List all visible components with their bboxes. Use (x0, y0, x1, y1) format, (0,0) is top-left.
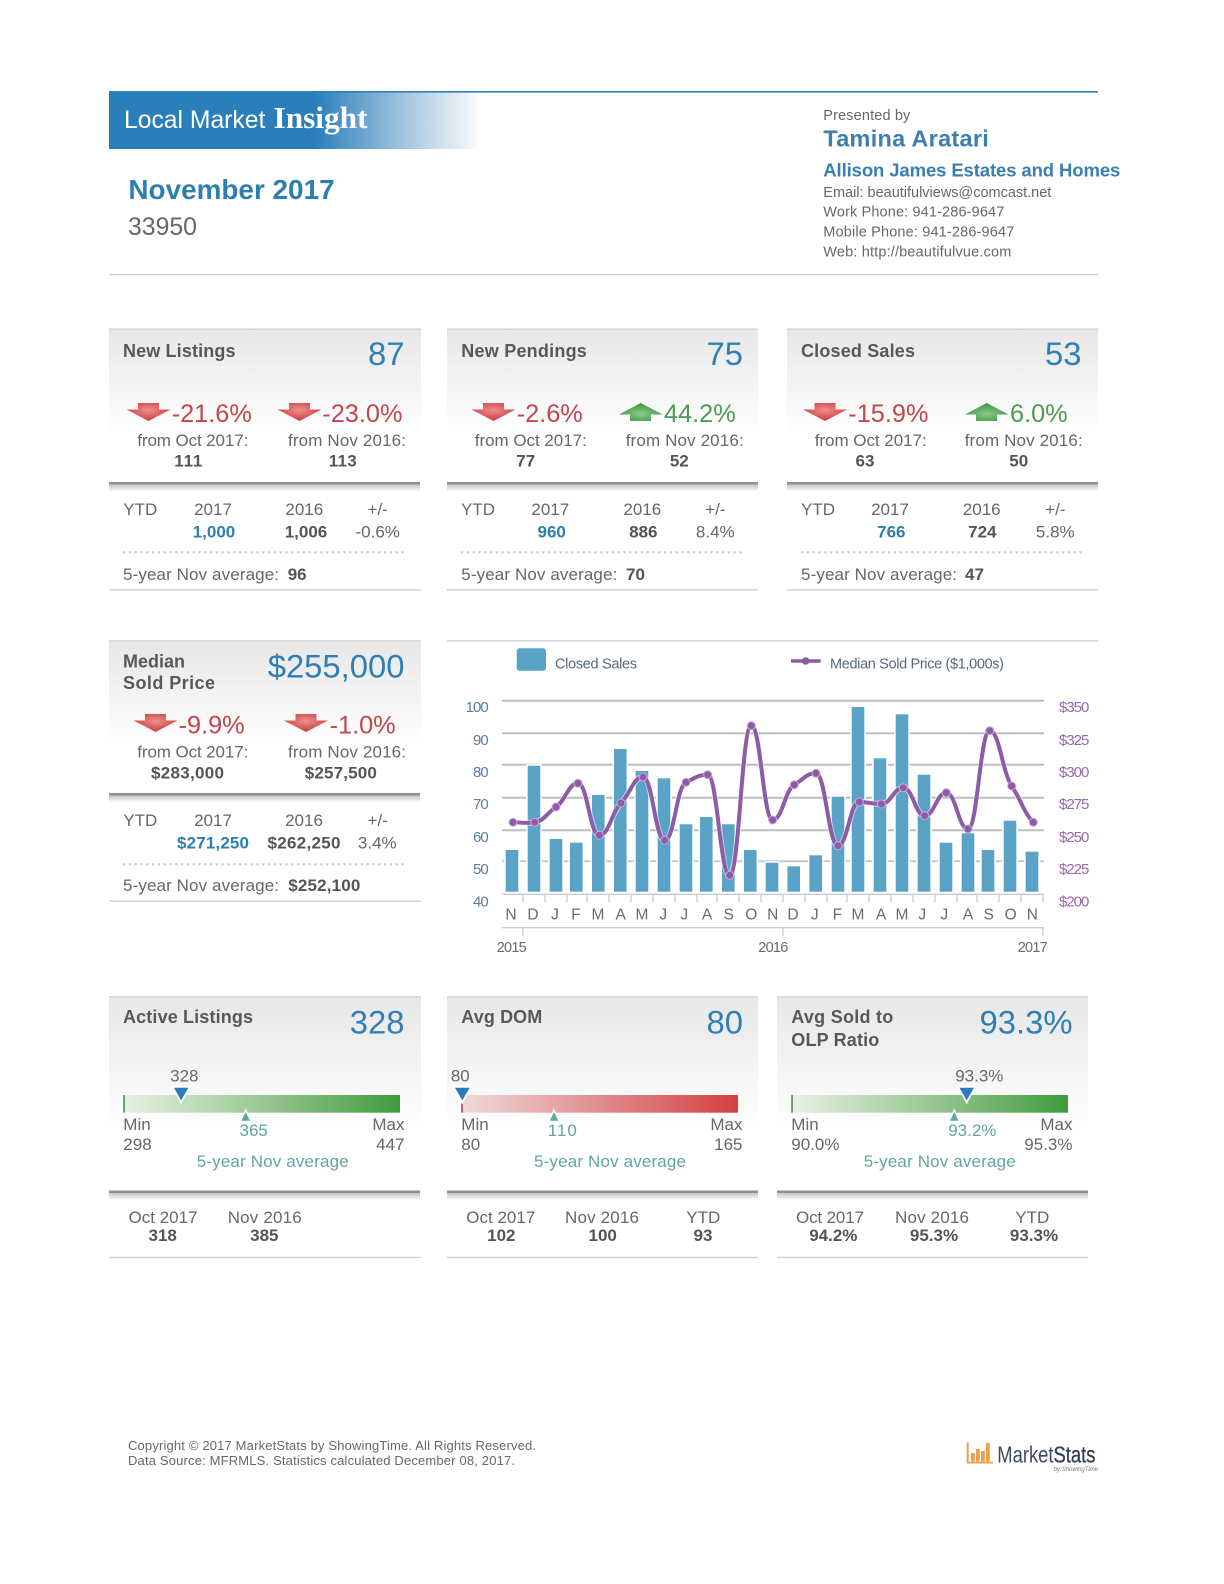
panel: New Pendings: 52 (670, 452, 689, 471)
legend: Closed Sales (517, 648, 637, 673)
panel: Avg DOM: Nov 2016 (565, 1208, 639, 1227)
panel: New Listings: 113 (329, 452, 357, 471)
bars: closed sales (506, 707, 1038, 892)
x axis: months and years: A (702, 906, 713, 923)
panel: Median Sold Price: $262,250 (268, 833, 340, 852)
panel: Avg Sold to OLP Ratio: Nov 2016 (895, 1208, 969, 1227)
panel: Avg DOM: Min (461, 1115, 489, 1134)
right axis labels: $300 (1059, 764, 1089, 781)
panel: Closed Sales: 5-year Nov average: (801, 565, 957, 584)
panel: Avg DOM: YTD (686, 1208, 720, 1227)
panel: Avg Sold to OLP Ratio: Max (1040, 1115, 1073, 1134)
panel: New Listings: 111 (174, 452, 202, 471)
panel: Median Sold Price: $252,100 (288, 876, 360, 895)
heading: Avg DOM: Avg DOM (461, 1007, 542, 1027)
panel: Avg DOM: 102 (487, 1226, 515, 1245)
panel: New Pendings: from Nov 2016: (626, 431, 744, 450)
panel: Avg Sold to OLP Ratio: 5-year Nov average (864, 1152, 1016, 1171)
gauge: days on market range: 80 (451, 1067, 470, 1086)
x axis: months and years: S (724, 906, 734, 923)
icon: down arrow (278, 403, 322, 421)
panel: Active Listings: 5-year Nov average (197, 1152, 349, 1171)
x axis: months and years: M (852, 906, 864, 923)
panel: New Pendings: 70 (626, 565, 645, 584)
right axis labels: $275 (1059, 796, 1089, 813)
legend: Median Sold Price: Median Sold Price ($1,000s) (830, 657, 1004, 673)
panel: New Pendings: 2017 (531, 500, 569, 519)
left axis labels: 60 (473, 829, 488, 846)
panel: Closed Sales: 5.8% (1036, 522, 1075, 541)
panel: Avg Sold to OLP Ratio (777, 996, 1088, 1258)
header banner (109, 91, 1098, 149)
report date and area (128, 174, 335, 241)
x axis: months and years: M (896, 906, 908, 923)
panel: New Listings: 96 (288, 565, 307, 584)
panel: Median Sold Price: 2016 (285, 811, 323, 830)
panel: Avg DOM: 5-year Nov average (534, 1152, 686, 1171)
header banner: Local Market (124, 107, 265, 134)
panel: Active Listings: 318 (149, 1226, 177, 1245)
value: 53: 53 (1045, 335, 1082, 372)
icon: up arrow (965, 403, 1008, 421)
panel: Avg Sold to OLP Ratio: 94.2% (809, 1226, 857, 1245)
panel: Median Sold Price: $257,500 (305, 763, 377, 782)
panel: Median Sold Price: 2017 (194, 811, 232, 830)
panel: New Pendings: 8.4% (696, 522, 735, 541)
x axis: months and years: D (787, 906, 799, 923)
panel: Avg DOM (447, 996, 758, 1258)
icon: up arrow (619, 403, 662, 421)
panel: Avg DOM: 93 (694, 1226, 712, 1245)
x axis: months and years: A (963, 906, 974, 923)
x axis: months and years: J (680, 906, 688, 923)
heading: Median Sold Price: Sold Price (123, 673, 215, 693)
right axis labels (1059, 699, 1089, 910)
left axis labels (466, 699, 488, 910)
x axis: months and years: J (918, 906, 926, 923)
value: 328: 328 (350, 1003, 404, 1040)
icon: down arrow (126, 403, 170, 421)
panel: Closed Sales: 2017 (871, 500, 909, 519)
left axis labels: 40 (473, 893, 488, 910)
panel: Active Listings: Oct 2017 (128, 1208, 198, 1227)
gauge: sold to list ratio range (791, 1067, 1068, 1121)
gauge: sold to list ratio range: 93.3% (955, 1067, 1003, 1086)
panel: New Pendings: from Oct 2017: (475, 431, 587, 450)
x axis: months and years: O (745, 906, 757, 923)
x axis: months and years: N (767, 906, 778, 923)
x axis: months and years: A (876, 906, 887, 923)
heading: Median Sold Price (123, 651, 215, 693)
heading: Closed Sales: Closed Sales (801, 341, 915, 361)
presenter contact block: Allison James Estates and Homes (823, 160, 1120, 181)
heading: Active Listings: Active Listings (123, 1007, 253, 1027)
panel: Avg Sold to OLP Ratio: 90.0% (791, 1135, 840, 1154)
panel: Closed Sales: 63 (856, 452, 874, 471)
x axis: months and years: D (527, 906, 539, 923)
presenter contact block: Presented by (823, 108, 911, 124)
panel: Avg Sold to OLP Ratio: 95.3% (1024, 1135, 1072, 1154)
left axis labels: 70 (473, 796, 488, 813)
panel: Median Sold Price: $283,000 (151, 763, 224, 782)
x axis: months and years: 2015 (497, 940, 527, 956)
right axis labels: $200 (1059, 893, 1089, 910)
report date and area: 33950 (128, 214, 197, 241)
panel: Median Sold Price: from Oct 2017: (137, 742, 248, 761)
panel: Avg DOM: 110 (548, 1121, 577, 1140)
panel: Active Listings: 447 (376, 1135, 404, 1154)
panel: New Listings: -0.6% (355, 522, 400, 541)
x axis: months and years: J (940, 906, 948, 923)
panel: Closed Sales: 724 (968, 522, 997, 541)
panel: Active Listings: 298 (123, 1135, 152, 1154)
footer text: Data Source: MFRMLS. Statistics calculated December 08, 2017. (128, 1453, 515, 1468)
footer text (128, 1438, 536, 1468)
panel: Avg DOM: Max (710, 1115, 743, 1134)
panel: Median Sold Price: +/- (368, 811, 388, 830)
footer text: Copyright © 2017 MarketStats by ShowingTime. All Rights Reserved. (128, 1438, 536, 1453)
x axis: months and years: F (571, 906, 581, 923)
panel: Closed Sales: YTD (801, 500, 835, 519)
panel: New Listings: -23.0% (322, 400, 402, 428)
x axis: months and years: N (1027, 906, 1038, 923)
x axis: months and years: S (984, 906, 994, 923)
heading: Avg Sold to OLP Ratio: OLP Ratio (791, 1030, 879, 1050)
panel: New Listings: 2016 (285, 500, 323, 519)
heading: Avg Sold to OLP Ratio: Avg Sold to (791, 1007, 893, 1027)
gauge: days on market range (451, 1067, 738, 1121)
line: median sold price (509, 722, 1037, 879)
panel: New Listings: from Nov 2016: (288, 431, 406, 450)
value: 93.3%: 93.3% (980, 1003, 1072, 1040)
left axis labels: 90 (473, 732, 488, 749)
panel: New Pendings: -2.6% (517, 400, 583, 428)
left axis labels: 50 (473, 861, 488, 878)
icon: down arrow (803, 403, 847, 421)
panel: New Listings: -21.6% (172, 400, 252, 428)
icon: down arrow (472, 403, 516, 421)
value: 80: 80 (707, 1003, 743, 1040)
panel: Median Sold Price: YTD (123, 811, 157, 830)
panel: Avg Sold to OLP Ratio: 95.3% (910, 1226, 958, 1245)
panel: Closed Sales: from Nov 2016: (965, 431, 1083, 450)
left axis labels: 100 (466, 699, 488, 716)
panel: Closed Sales: 47 (965, 565, 984, 584)
x axis: months and years: 2017 (1018, 940, 1048, 956)
panel: Avg DOM: 165 (714, 1135, 742, 1154)
panel: Active Listings: Min (123, 1115, 151, 1134)
panel: Closed Sales: from Oct 2017: (815, 431, 927, 450)
chart: Closed Sales and Median Sold Price (447, 640, 1098, 956)
report date and area: November 2017 (128, 174, 335, 205)
panel: New Listings: 2017 (194, 500, 232, 519)
panel: New Pendings: +/- (705, 500, 725, 519)
x axis: months and years: O (1005, 906, 1017, 923)
logo: MarketStats (967, 1442, 1099, 1473)
panel: Avg DOM: 100 (589, 1226, 617, 1245)
presenter contact block (823, 108, 1120, 260)
left axis labels: 80 (473, 764, 488, 781)
panel: Avg Sold to OLP Ratio: YTD (1015, 1208, 1049, 1227)
panel: Closed Sales: 2016 (963, 500, 1001, 519)
presenter contact block: Mobile Phone: 941-286-9647 (823, 224, 1014, 240)
panel: Avg DOM: 80 (461, 1135, 480, 1154)
gauge: active listings range: 328 (170, 1067, 198, 1086)
right axis labels: $250 (1059, 829, 1089, 846)
right axis labels: $325 (1059, 732, 1089, 749)
panel: New Listings: YTD (123, 500, 157, 519)
panel: Active Listings (109, 996, 421, 1258)
right axis labels: $350 (1059, 699, 1089, 716)
panel: Active Listings: Max (372, 1115, 405, 1134)
panel: Closed Sales: -15.9% (848, 400, 928, 428)
panel: Avg DOM: Oct 2017 (466, 1208, 535, 1227)
panel: New Pendings: 2016 (623, 500, 661, 519)
panel: Median Sold Price: $271,250 (177, 833, 249, 852)
gauge: active listings range (123, 1067, 400, 1121)
x axis: months and years: J (551, 906, 559, 923)
legend: Closed Sales: Closed Sales (555, 657, 637, 673)
x axis: months and years: J (811, 906, 819, 923)
heading: New Pendings: New Pendings (461, 341, 587, 361)
x axis: months and years (497, 894, 1048, 956)
panel: Median Sold Price: from Nov 2016: (288, 742, 406, 761)
presenter contact block: Work Phone: 941-286-9647 (823, 204, 1004, 220)
panel: New Pendings: 886 (629, 522, 657, 541)
panel: Median Sold Price: 5-year Nov average: (123, 876, 279, 895)
panel: Active Listings: Nov 2016 (228, 1208, 302, 1227)
x axis: months and years: 2016 (758, 940, 788, 956)
logo: MarketStats: by ShowingTime (1054, 1467, 1099, 1473)
panel: Closed Sales: +/- (1045, 500, 1065, 519)
presenter contact block: Web: http://beautifulvue.com (823, 244, 1011, 260)
panel: Median Sold Price: 3.4% (358, 833, 397, 852)
presenter contact block: Email: beautifulviews@comcast.net (823, 185, 1051, 201)
right axis labels: $225 (1059, 861, 1089, 878)
heading: New Listings: New Listings (123, 341, 236, 361)
panel: Closed Sales: 50 (1009, 452, 1028, 471)
panel: New Pendings (447, 328, 758, 590)
panel: Median Sold Price (109, 640, 421, 902)
panel: Median Sold Price: -1.0% (330, 712, 396, 740)
presenter contact block: Tamina Aratari (823, 126, 989, 152)
panel: New Listings: 5-year Nov average: (123, 565, 279, 584)
panel: New Pendings: 44.2% (664, 400, 736, 428)
panel: New Listings: 1,000 (193, 522, 235, 541)
icon: down arrow (284, 714, 328, 732)
value: $255,000: $255,000 (268, 648, 404, 685)
panel: Median Sold Price: -9.9% (179, 712, 245, 740)
logo: MarketStats: MarketStats (997, 1442, 1095, 1468)
x axis: months and years: M (592, 906, 604, 923)
icon: down arrow (134, 714, 178, 732)
panel: Avg Sold to OLP Ratio: Min (791, 1115, 819, 1134)
panel: New Pendings: 960 (538, 522, 566, 541)
panel: New Listings: 1,006 (285, 522, 327, 541)
x axis: months and years: J (659, 906, 667, 923)
value: 75: 75 (707, 335, 743, 372)
panel: Active Listings: 365 (240, 1121, 268, 1140)
panel: Avg Sold to OLP Ratio: 93.2% (948, 1121, 996, 1140)
panel: New Pendings: YTD (461, 500, 495, 519)
panel: Avg Sold to OLP Ratio: Oct 2017 (796, 1208, 864, 1227)
value: 87: 87 (368, 335, 404, 372)
x axis: months and years: M (636, 906, 648, 923)
heading: Avg Sold to OLP Ratio (791, 1007, 893, 1050)
panel: New Listings: from Oct 2017: (137, 431, 248, 450)
heading: Median Sold Price: Median (123, 651, 185, 671)
header banner: Insight (274, 100, 368, 135)
panel: Active Listings: 385 (250, 1226, 278, 1245)
panel: Avg Sold to OLP Ratio: 93.3% (1010, 1226, 1058, 1245)
panel: New Pendings: 77 (516, 452, 535, 471)
panel: New Listings: +/- (368, 500, 388, 519)
panel: New Listings (109, 328, 421, 590)
panel: Closed Sales: 6.0% (1010, 400, 1068, 428)
x axis: months and years: A (616, 906, 627, 923)
x axis: months and years: F (833, 906, 842, 923)
panel: Closed Sales: 766 (877, 522, 905, 541)
panel: Closed Sales (787, 328, 1098, 590)
panel: New Pendings: 5-year Nov average: (461, 565, 617, 584)
x axis: months and years: N (505, 906, 517, 923)
